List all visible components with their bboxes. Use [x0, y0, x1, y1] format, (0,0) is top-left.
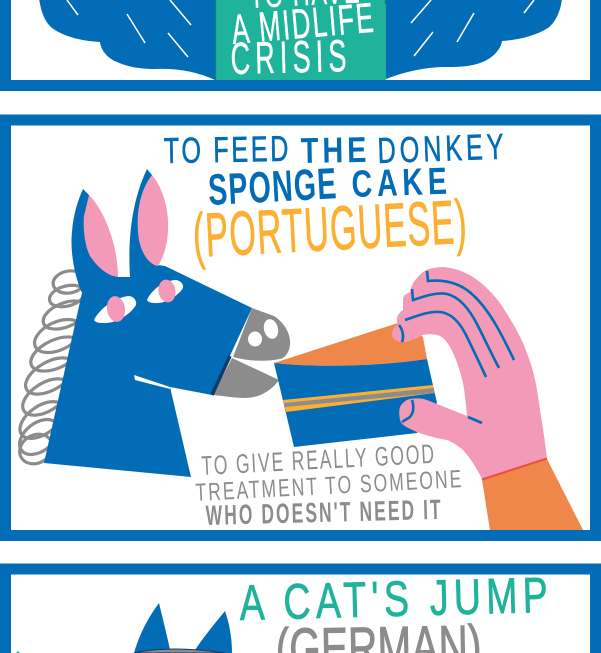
icon: right wing [386, 0, 562, 79]
icon: donkey [13, 169, 290, 477]
banner text: CRISIS [230, 30, 347, 84]
heading: portuguese: (PORTUGUESE) [191, 187, 468, 271]
meaning text [195, 438, 462, 531]
heading: to feed the donkey sponge cake: DONKEY [377, 126, 504, 171]
icon: arm sleeve [482, 459, 583, 530]
snout [233, 308, 290, 361]
heading: to feed the donkey sponge cake: SPONGE [207, 158, 337, 214]
icon: hand [392, 267, 547, 480]
heading: to feed the donkey sponge cake: TO FEED [163, 128, 289, 171]
heading: a cat's jump: A CAT'S JUMP [239, 568, 548, 631]
meaning text: WHO DOESN'T NEED IT [205, 494, 441, 531]
head and neck [44, 169, 252, 477]
ear inner left [84, 195, 118, 277]
right eye [147, 278, 183, 304]
left eye [94, 295, 136, 323]
panel: cat's jump [6, 568, 596, 653]
wrist line [482, 458, 547, 480]
meaning text: TREATMENT TO SOMEONE [195, 464, 462, 507]
finger lines [399, 271, 514, 423]
mouth slit [134, 375, 170, 389]
icon: left wing [39, 0, 215, 80]
panel: donkey sponge cake [6, 120, 596, 536]
heading: to feed the donkey sponge cake [163, 126, 504, 214]
icon: cat head [134, 603, 232, 653]
banner text [230, 0, 375, 84]
ear inner right [138, 175, 168, 266]
icon: green mark [16, 651, 20, 653]
meaning text: TO GIVE REALLY GOOD [201, 438, 435, 481]
icon: sponge cake [274, 323, 437, 447]
heading: to feed the donkey sponge cake: CAKE [351, 161, 448, 206]
green banner [215, 0, 386, 84]
mane [13, 268, 91, 470]
panel: midlife crisis [6, 0, 596, 85]
heading: to feed the donkey sponge cake: THE [300, 129, 367, 171]
lower jaw [213, 358, 279, 398]
